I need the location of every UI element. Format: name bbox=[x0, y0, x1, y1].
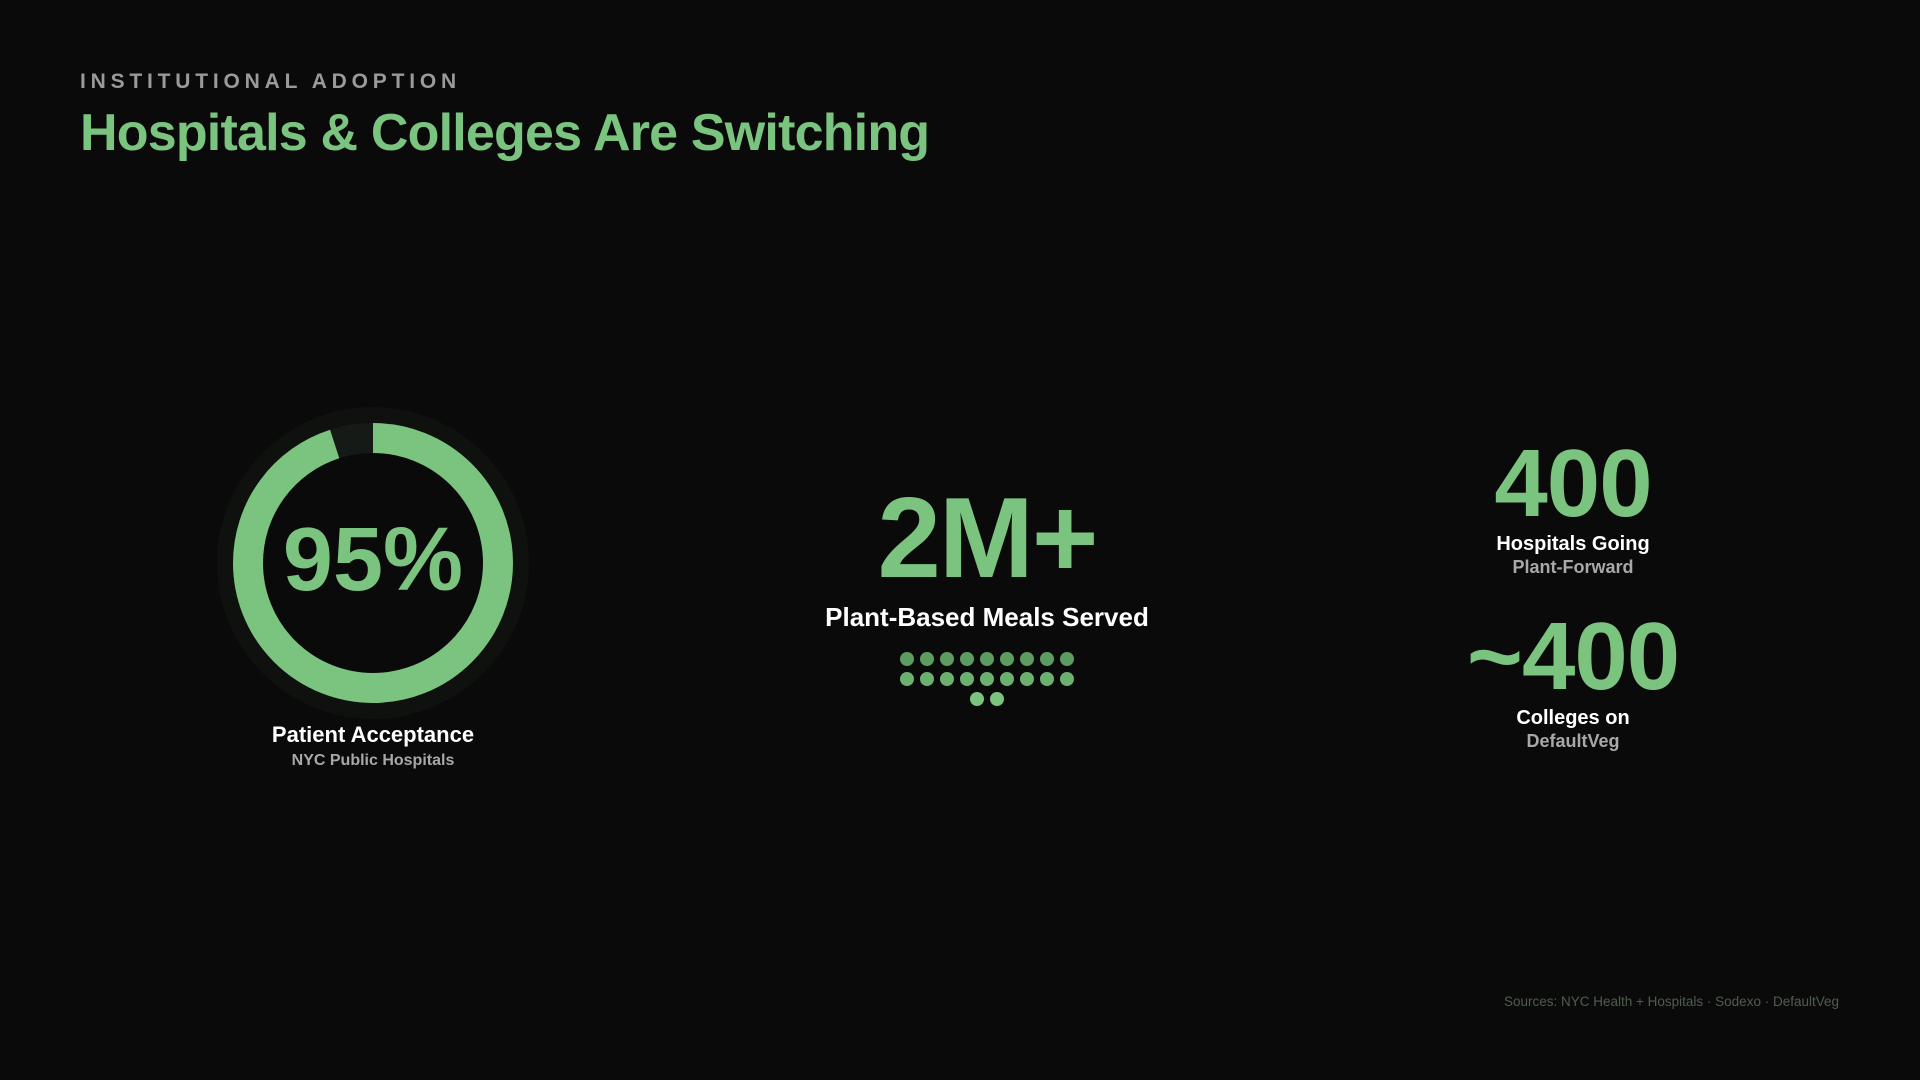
value 95%: 95% bbox=[283, 510, 463, 610]
panel: patient acceptance bbox=[233, 423, 513, 769]
dot icon grid bbox=[900, 652, 1074, 706]
sublabel: NYC Public Hospitals bbox=[292, 752, 454, 769]
value 2M+: 2M+ bbox=[878, 475, 1096, 602]
sublabel: DefaultVeg bbox=[1526, 731, 1620, 751]
donut chart 95% bbox=[233, 423, 513, 703]
panel: meals served bbox=[825, 475, 1149, 706]
panel: hospitals count bbox=[1494, 430, 1652, 577]
panel: colleges count bbox=[1467, 603, 1679, 751]
title: Hospitals & Colleges Are Switching bbox=[80, 104, 929, 162]
label: Colleges on bbox=[1516, 707, 1630, 729]
sources footnote: Sources: NYC Health + Hospitals · Sodexo · DefaultVeg bbox=[1504, 994, 1839, 1009]
label: Plant-Based Meals Served bbox=[825, 602, 1149, 632]
value ~400: ~400 bbox=[1467, 603, 1679, 710]
value 400: 400 bbox=[1494, 430, 1652, 537]
eyebrow label: INSTITUTIONAL ADOPTION bbox=[80, 70, 461, 93]
sublabel: Plant-Forward bbox=[1512, 557, 1634, 577]
label: Patient Acceptance bbox=[272, 722, 474, 747]
label: Hospitals Going bbox=[1496, 533, 1650, 555]
